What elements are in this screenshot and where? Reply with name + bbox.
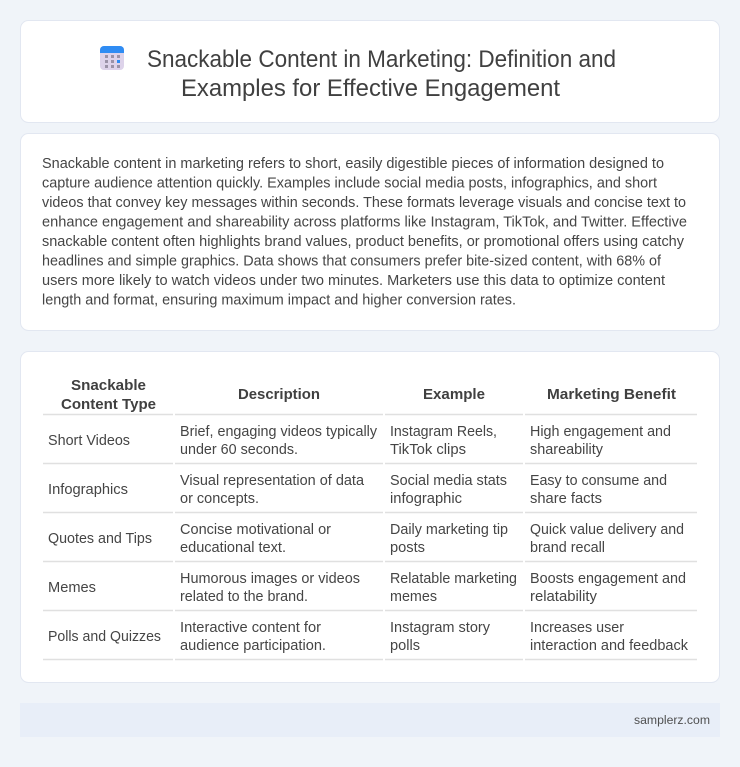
text block: definition: capture audience attention quickly. Examples include social media posts, infographics, and short [42, 176, 657, 192]
text block: definition: length and format, ensuring maximum impact and higher conversion rates. [42, 292, 516, 308]
row: infographics: Social media stats [390, 473, 507, 489]
table header row: Example [423, 386, 485, 403]
text block: definition: users more likely to watch videos under two minutes. Marketers use this data to optimize content [42, 273, 665, 289]
row: short videos: TikTok clips [390, 442, 466, 458]
row: short videos: High engagement and [530, 424, 671, 440]
title: Examples for Effective Engagement [181, 75, 560, 102]
row: memes: Boosts engagement and [530, 571, 686, 587]
row: polls and quizzes: Polls and Quizzes [48, 629, 161, 645]
footer bar: samplerz.com [634, 713, 710, 727]
row: short videos: Short Videos [48, 433, 130, 449]
row: polls and quizzes: audience participation. [180, 638, 326, 654]
row: memes: Humorous images or videos [180, 571, 360, 587]
row: memes [48, 571, 686, 605]
row: quotes and tips [48, 522, 684, 556]
row: infographics: Visual representation of data [180, 473, 364, 489]
row: quotes and tips: educational text. [180, 540, 286, 556]
title: Snackable Content in Marketing: Definition and [147, 46, 616, 73]
text block: definition: Snackable content in marketing refers to short, easily digestible pieces of information designed to [42, 156, 664, 172]
row: polls and quizzes: Instagram story [390, 620, 491, 636]
footer bar [20, 703, 720, 737]
row: short videos: shareability [530, 442, 604, 458]
panel: intro paragraph [20, 134, 720, 330]
row: infographics: Infographics [48, 482, 128, 498]
text block: definition: snackable content often highlights brand values, product benefits, or promotional offers using catchy [42, 234, 685, 250]
row: infographics: or concepts. [180, 491, 259, 507]
row: memes: Relatable marketing [390, 571, 517, 587]
row: quotes and tips: posts [390, 540, 425, 556]
row: infographics: share facts [530, 491, 602, 507]
row: memes: relatability [530, 589, 598, 605]
icon: calendar [100, 46, 124, 70]
row: quotes and tips: Quotes and Tips [48, 531, 152, 547]
row: memes: memes [390, 589, 437, 605]
row: short videos: Brief, engaging videos typically [180, 424, 378, 440]
row: polls and quizzes: Increases user [530, 620, 624, 636]
text block: definition: enhance engagement and shareability across platforms like Instagram, TikTok, and Twitter. Effective [42, 214, 687, 230]
table header row: Marketing Benefit [547, 386, 676, 403]
table header row [61, 377, 676, 413]
row: polls and quizzes: interaction and feedback [530, 638, 689, 654]
row: short videos [48, 424, 671, 458]
table header row: Snackable [71, 377, 146, 394]
panel: content types table [20, 352, 720, 682]
row: quotes and tips: Concise motivational or [180, 522, 331, 538]
row: infographics [48, 473, 667, 507]
row: polls and quizzes: Interactive content for [180, 620, 321, 636]
table header row: Content Type [61, 396, 156, 413]
text block: definition: headlines and simple graphics. Data shows that consumers prefer bite-sized content, with 68% of [42, 254, 661, 270]
panel: title header [20, 20, 720, 122]
row: quotes and tips: brand recall [530, 540, 605, 556]
row: infographics: Easy to consume and [530, 473, 667, 489]
row: quotes and tips: Quick value delivery and [530, 522, 684, 538]
row: short videos: under 60 seconds. [180, 442, 298, 458]
row: memes: Memes [48, 580, 96, 596]
row: short videos: Instagram Reels, [390, 424, 497, 440]
text block: definition [42, 156, 687, 308]
table header row: Description [238, 386, 320, 403]
row: quotes and tips: Daily marketing tip [390, 522, 508, 538]
row: polls and quizzes: polls [390, 638, 420, 654]
title [147, 46, 616, 102]
row: infographics: infographic [390, 491, 462, 507]
row: polls and quizzes [48, 620, 689, 654]
row: memes: related to the brand. [180, 589, 308, 605]
text block: definition: videos that convey key messages within seconds. These formats leverage visuals and concise text to [42, 195, 686, 211]
